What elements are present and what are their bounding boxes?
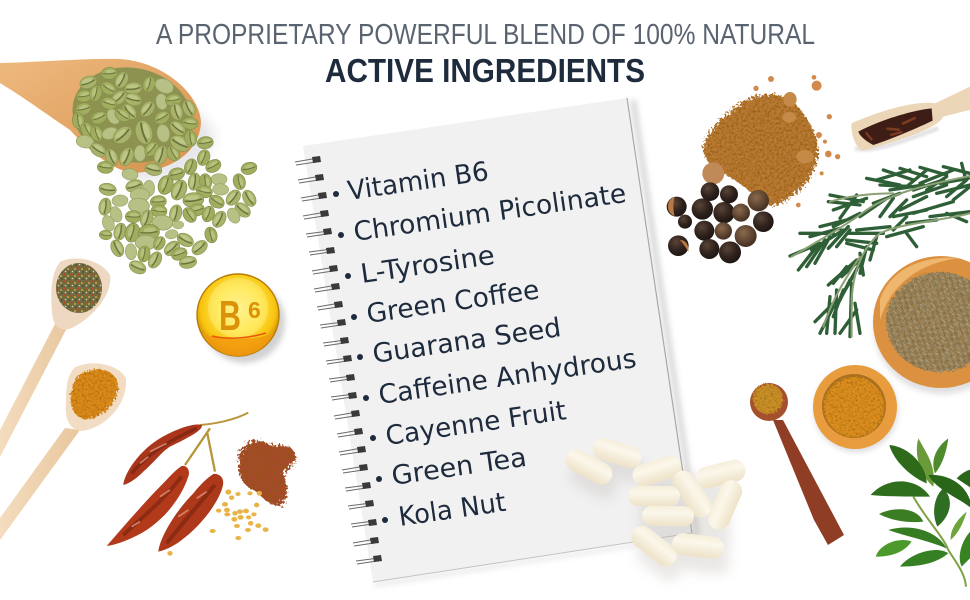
chili seeds: [167, 489, 269, 556]
red chili peppers: [107, 413, 248, 552]
wooden scoop with cloves: [851, 87, 970, 151]
spiral binding: [295, 156, 382, 564]
wooden spoon with mixed spice: [0, 258, 110, 457]
loose green coffee beans: [97, 135, 259, 276]
vitamin B6 capsule: 6: [248, 297, 261, 323]
vitamin B6 capsule: B: [219, 292, 241, 339]
green tea leaves: [871, 438, 970, 587]
small wooden spoon with spice: [750, 383, 844, 545]
white capsules: [562, 435, 748, 585]
guarana seeds: [667, 162, 774, 263]
title line: proprietary blend: A PROPRIETARY POWERFUL BLEND OF 100% NATURAL: [156, 19, 815, 51]
ingredient list: Cayenne Fruit: [384, 395, 568, 452]
small bowl with curry powder: [813, 365, 898, 452]
ingredient list: Caffeine Anhydrous: [377, 343, 638, 411]
notebook: [295, 98, 700, 586]
vitamin B6 capsule: [197, 274, 285, 363]
red chili powder: [238, 441, 296, 506]
cocoa powder pile: [703, 75, 840, 207]
heading: active ingredients: ACTIVE INGREDIENTS: [325, 52, 645, 89]
ingredient list: [333, 156, 638, 533]
wooden bowl with cumin seeds: [873, 256, 970, 394]
ingredient list: Chromium Picolinate: [352, 178, 628, 248]
wooden spoon with green coffee beans: [0, 57, 215, 181]
rosemary sprigs: [790, 163, 970, 337]
wooden spoon with turmeric: [0, 363, 126, 540]
ingredient list: Green Tea: [390, 442, 529, 492]
ingredient list: Kola Nut: [397, 487, 508, 533]
ingredient list: L-Tyrosine: [359, 240, 497, 290]
ingredient list: Vitamin B6: [346, 156, 491, 207]
ingredient list: Green Coffee: [365, 274, 541, 330]
ingredient list: Guarana Seed: [371, 312, 563, 370]
